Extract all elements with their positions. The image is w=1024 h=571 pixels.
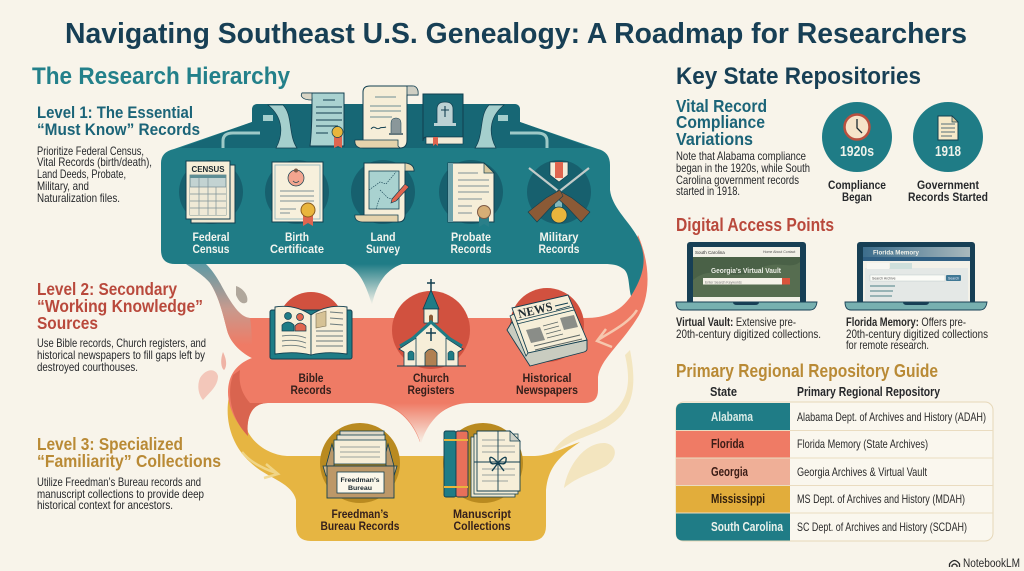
icon: birth certificate bbox=[265, 160, 329, 226]
text block: level 1: Land Deeds, Probate, bbox=[37, 167, 126, 181]
label: freedman's bureau records: Freedman’s bbox=[332, 507, 389, 521]
text block: level 3: historical context for ancestors. bbox=[37, 498, 173, 512]
tail: teal to coral stripe bbox=[186, 264, 252, 358]
shade: coral curve bbox=[230, 370, 268, 436]
stat: 1918 government records started: 1918 bbox=[935, 143, 961, 160]
laptop: georgia's virtual vault bbox=[676, 242, 817, 310]
row: mississippi: MS Dept. of Archives and History (MDAH) bbox=[797, 492, 965, 506]
icon: church bbox=[392, 279, 470, 369]
label: land survey: Land bbox=[370, 230, 396, 244]
text block: level 1: Naturalization files. bbox=[37, 191, 120, 205]
icon: freedman's bureau box: Bureau bbox=[348, 485, 372, 492]
stat: 1920s compliance began: 1920s bbox=[840, 143, 874, 160]
icon group: level 3 records bbox=[320, 423, 523, 533]
funnel: coral to gold bbox=[385, 403, 455, 444]
ribbon: left bbox=[223, 105, 297, 148]
text block: virtual vault bbox=[676, 315, 821, 341]
row: florida: Florida Memory (State Archives) bbox=[797, 437, 928, 451]
title: Navigating Southeast U.S. Genealogy: A Roadmap for Researchers bbox=[65, 18, 967, 50]
text block: vital record compliance: Carolina government records bbox=[676, 173, 799, 187]
icon: clock bbox=[844, 114, 870, 140]
label: land survey bbox=[366, 230, 400, 256]
text block: florida memory: 20th-century digitized collections bbox=[846, 327, 988, 341]
row: alabama: Alabama bbox=[711, 410, 754, 424]
label: manuscript collections: Manuscript bbox=[453, 507, 511, 521]
row: georgia: Georgia bbox=[711, 465, 749, 479]
band: level 3 gold bbox=[228, 383, 580, 541]
stat: 1920s compliance began bbox=[822, 102, 892, 204]
label: federal census: Federal bbox=[192, 230, 230, 244]
laptop: florida memory bbox=[845, 242, 987, 310]
arrow: coral band arrow bbox=[597, 310, 637, 347]
label: military records: Military bbox=[540, 230, 579, 244]
label: historical newspapers: Historical bbox=[522, 371, 572, 385]
label: bible records: Bible bbox=[298, 371, 324, 385]
label: historical newspapers: Newspapers bbox=[516, 383, 578, 397]
heading: key state repositories: Key State Repositories bbox=[676, 63, 921, 90]
text block: level 3: Level 3: Specialized bbox=[37, 434, 183, 454]
laptop: georgia's virtual vault: Georgia’s Virtual Vault bbox=[711, 266, 781, 275]
text block: level 2: “Working Knowledge” bbox=[37, 296, 203, 316]
roof: darker upper roof bbox=[180, 104, 592, 148]
label: birth certificate: Certificate bbox=[270, 242, 324, 256]
text block: vital record compliance: began in the 1920s, while South bbox=[676, 161, 810, 175]
text block: vital record compliance: Vital Record bbox=[676, 96, 767, 116]
icon: probate records bbox=[439, 160, 503, 227]
icon: document bbox=[938, 116, 958, 140]
laptop: florida memory: Search bbox=[948, 276, 959, 280]
text block: florida memory: Florida Memory: Offers pre- bbox=[846, 315, 966, 329]
stat: 1920s compliance began: Began bbox=[842, 190, 872, 204]
table header bbox=[710, 385, 940, 399]
text block: florida memory: for remote research. bbox=[846, 338, 929, 352]
text block: level 1: Vital Records (birth/death), bbox=[37, 155, 152, 169]
table header: State bbox=[710, 385, 737, 399]
text block: level 1: Military, and bbox=[37, 179, 89, 193]
drop: pale coral splash bbox=[198, 370, 218, 400]
laptop: florida memory: Search Archive bbox=[872, 276, 896, 280]
band: level 2 coral bbox=[186, 235, 648, 444]
stat: 1918 government records started: Government bbox=[917, 178, 979, 192]
text block: level 1: Level 1: The Essential bbox=[37, 103, 193, 122]
icon group: level 2 records bbox=[270, 279, 587, 397]
icon: military records bbox=[527, 160, 591, 224]
icon: land survey bbox=[351, 160, 415, 224]
label: probate records bbox=[450, 230, 492, 256]
icon: federal census bbox=[179, 160, 243, 224]
text block: vital record compliance: started in 1918. bbox=[676, 184, 740, 198]
text block: level 2 bbox=[37, 279, 206, 374]
swoosh: pale gold tail bbox=[550, 350, 633, 488]
text block: level 2: destroyed courthouses. bbox=[37, 360, 138, 374]
table header: Primary Regional Repository bbox=[797, 385, 940, 399]
label: probate records: Records bbox=[450, 242, 492, 256]
text block: florida memory bbox=[846, 315, 988, 352]
label: federal census bbox=[192, 230, 230, 256]
heading: digital access points: Digital Access Points bbox=[676, 215, 834, 235]
stat: 1918 government records started bbox=[908, 102, 988, 204]
icon: scroll with seal bbox=[301, 93, 344, 148]
label: historical newspapers bbox=[516, 371, 578, 397]
icon: freedman's bureau box bbox=[320, 423, 400, 503]
text block: vital record compliance bbox=[676, 96, 810, 198]
row: south carolina bbox=[676, 514, 967, 540]
text block: virtual vault: Virtual Vault: Extensive pre- bbox=[676, 315, 796, 329]
row: mississippi bbox=[676, 486, 965, 512]
heading: the research hierarchy: The Research Hierarchy bbox=[32, 63, 291, 90]
icon: historical newspapers: NEWS bbox=[517, 299, 554, 321]
label: birth certificate bbox=[270, 230, 324, 256]
stat: 1920s compliance began: Compliance bbox=[828, 178, 886, 192]
text block: level 3: manuscript collections to provide deep bbox=[37, 487, 204, 501]
label: military records: Records bbox=[538, 242, 580, 256]
text block: level 2: Use Bible records, Church registers, and bbox=[37, 336, 206, 350]
text block: level 2: historical newspapers to fill gaps left by bbox=[37, 348, 205, 362]
stat: 1918 government records started: Records Started bbox=[908, 190, 988, 204]
label: federal census: Census bbox=[192, 242, 230, 256]
text block: vital record compliance: Variations bbox=[676, 129, 753, 149]
label: land survey: Survey bbox=[366, 242, 400, 256]
text block: level 3: “Familiarity” Collections bbox=[37, 451, 221, 471]
icon: historical newspapers bbox=[507, 288, 587, 366]
table: repositories by state bbox=[676, 385, 993, 541]
text block: virtual vault: 20th-century digitized collections. bbox=[676, 327, 821, 341]
row: south carolina: SC Dept. of Archives and History (SCDAH) bbox=[797, 520, 967, 534]
text block: vital record compliance: Note that Alabama compliance bbox=[676, 149, 806, 163]
label: manuscript collections: Collections bbox=[454, 519, 511, 533]
text block: level 1: “Must Know” Records bbox=[37, 120, 200, 139]
label: military records bbox=[538, 230, 580, 256]
row: south carolina: South Carolina bbox=[711, 520, 784, 534]
label: church registers: Registers bbox=[408, 383, 455, 397]
row: florida bbox=[676, 431, 928, 458]
drop: coral drip bbox=[221, 352, 226, 370]
band: level 1 teal panel bbox=[161, 104, 644, 305]
text block: level 1: Prioritize Federal Census, bbox=[37, 144, 144, 158]
icon: manuscript collections bbox=[443, 423, 523, 503]
laptop: georgia's virtual vault: Home About Contact bbox=[763, 250, 795, 254]
arrow: gold band arrow bbox=[242, 452, 278, 478]
icon: freedman's bureau box: Freedman’s bbox=[340, 477, 380, 484]
label: birth certificate: Birth bbox=[285, 230, 309, 244]
text block: level 2: Level 2: Secondary bbox=[37, 279, 177, 299]
label: freedman's bureau records: Bureau Records bbox=[320, 519, 400, 533]
text block: level 3 bbox=[37, 434, 221, 512]
icon: book with gravestone bbox=[423, 94, 463, 146]
text block: vital record compliance: Compliance bbox=[676, 112, 765, 132]
icon: bible bbox=[270, 292, 352, 359]
icon group: level 1 records bbox=[179, 160, 591, 256]
table frame bbox=[676, 402, 993, 541]
text block: level 1 bbox=[37, 103, 200, 205]
row: georgia: Georgia Archives & Virtual Vault bbox=[797, 465, 928, 479]
label: bible records: Records bbox=[290, 383, 332, 397]
row: florida: Florida bbox=[711, 437, 745, 451]
row: mississippi: Mississippi bbox=[711, 492, 765, 506]
laptop: florida memory: Florida Memory bbox=[873, 250, 919, 256]
label: bible records bbox=[290, 371, 332, 397]
text block: level 2: Sources bbox=[37, 313, 98, 333]
heading: primary regional repository guide: Primary Regional Repository Guide bbox=[676, 361, 938, 381]
funnel: teal to coral bbox=[345, 264, 402, 305]
icon: federal census: CENSUS bbox=[192, 165, 225, 174]
icon: deed scroll bbox=[355, 86, 418, 148]
laptop: georgia's virtual vault: South Carolina bbox=[695, 250, 725, 255]
label: church registers bbox=[408, 371, 455, 397]
label: church registers: Church bbox=[413, 371, 449, 385]
label: manuscript collections bbox=[453, 507, 511, 533]
text block: level 3: Utilize Freedman’s Bureau records and bbox=[37, 475, 201, 489]
ribbon: right bbox=[475, 105, 547, 148]
label: freedman's bureau records bbox=[320, 507, 400, 533]
row: alabama bbox=[676, 403, 986, 430]
row: georgia bbox=[676, 458, 928, 485]
drop: grey splash bbox=[236, 286, 247, 303]
label: probate records: Probate bbox=[451, 230, 491, 244]
laptop: georgia's virtual vault: Enter Search Keywords bbox=[705, 280, 742, 284]
